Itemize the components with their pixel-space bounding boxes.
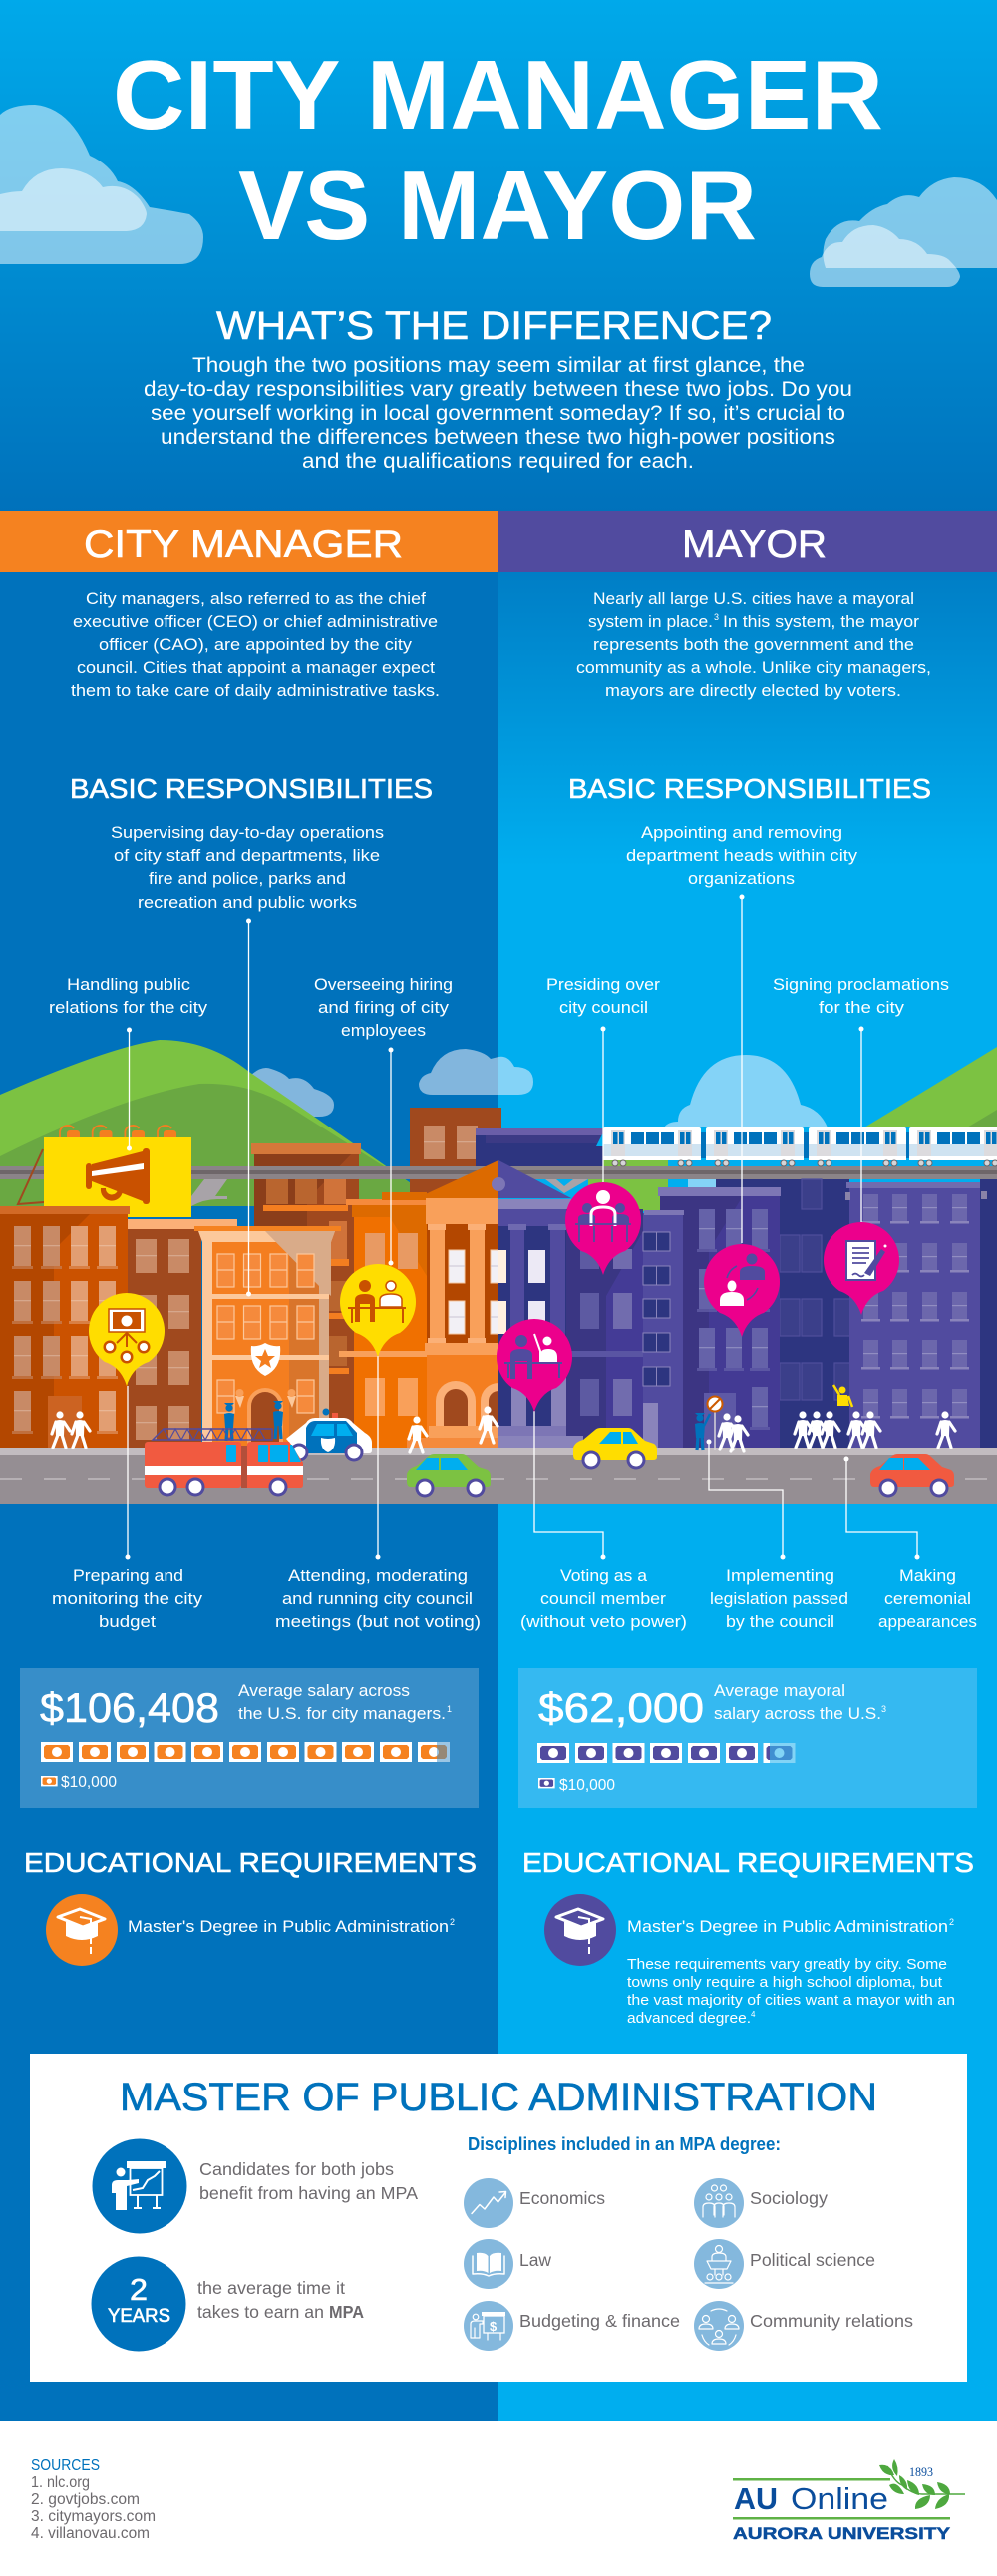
header: mayor: MAYOR	[682, 523, 827, 566]
salary caption: salary across the U.S.	[714, 1704, 881, 1723]
hills	[0, 1040, 997, 1211]
sources: 4. villanovau.com	[31, 2525, 150, 2542]
salary caption: 1	[447, 1704, 452, 1714]
mayor description: 3	[714, 612, 719, 622]
billboard with megaphone	[18, 1126, 191, 1217]
scene sky clouds	[249, 1049, 828, 1127]
label: ceremonial: ceremonial	[884, 1589, 971, 1608]
icon: megaphone	[86, 1148, 150, 1204]
pin: signing	[824, 1222, 899, 1315]
mayor description: In this system, the mayor	[723, 612, 919, 631]
pin: budget	[89, 1293, 165, 1386]
label: presiding: Presiding over	[546, 975, 660, 994]
label: supervising: fire and police, parks and	[149, 869, 346, 888]
city manager description: officer (CAO), are appointed by the city	[99, 635, 413, 654]
education text right: advanced degree.	[627, 2011, 751, 2027]
text: average time: the average time it	[197, 2278, 345, 2298]
disciplines heading: Disciplines included in an MPA degree:	[468, 2134, 781, 2154]
discipline: community relations: Community relations	[750, 2311, 913, 2331]
label: voting	[520, 1566, 687, 1631]
label: overseeing hiring: employees	[341, 1021, 426, 1040]
text: average time	[197, 2278, 364, 2322]
title: CITY MANAGER	[113, 40, 883, 150]
mayor description: Nearly all large U.S. cities have a mayoral	[593, 589, 914, 608]
text: benefit: benefit from having an MPA	[199, 2183, 418, 2203]
panel: master of public administration	[30, 2054, 967, 2382]
pedestrians	[52, 1406, 955, 1452]
label: handling public relations: relations for the city	[49, 998, 208, 1017]
label: voting: Voting as a	[560, 1566, 648, 1585]
discipline: budgeting and finance	[464, 2301, 680, 2351]
salary caption: 3	[881, 1704, 886, 1714]
text: average time: MPA	[329, 2302, 364, 2322]
sources: 3. citymayors.com	[31, 2508, 156, 2525]
heading: basic responsibilities left: BASIC RESPONSIBILITIES	[70, 773, 433, 804]
education text right: 4	[751, 2010, 756, 2019]
logo: AU Online Aurora University: Online	[791, 2481, 888, 2516]
header: city manager: CITY MANAGER	[84, 523, 403, 566]
label: implementing: Implementing	[726, 1566, 834, 1585]
discipline: budgeting and finance: Budgeting & finance	[519, 2311, 680, 2331]
label: overseeing hiring: and firing of city	[318, 998, 450, 1017]
logo: AU Online Aurora University: AU	[734, 2481, 778, 2516]
intro paragraph: see yourself working in local government someday? If so, it’s crucial to	[151, 401, 845, 425]
heading: basic responsibilities right: BASIC RESPONSIBILITIES	[568, 773, 931, 804]
panel heading: MASTER OF PUBLIC ADMINISTRATION	[120, 2076, 877, 2119]
street	[0, 1448, 997, 1504]
mayor description: community as a whole. Unlike city managers,	[576, 658, 931, 677]
yellow car	[573, 1428, 657, 1469]
label: supervising: recreation and public works	[138, 893, 357, 912]
label: appointing: Appointing and removing	[641, 823, 842, 842]
mayor description: mayors are directly elected by voters.	[605, 681, 901, 700]
label: signing: Signing proclamations	[773, 975, 949, 994]
label: implementing	[710, 1566, 848, 1631]
discipline: sociology	[694, 2178, 828, 2228]
pin: presiding	[565, 1182, 641, 1275]
text: benefit: Candidates for both jobs	[199, 2159, 394, 2179]
police officers and sign	[224, 1396, 722, 1450]
discipline: law: Law	[519, 2250, 551, 2270]
label: attending meetings: Attending, moderating	[288, 1566, 468, 1585]
city manager description: council. Cities that appoint a manager expect	[77, 658, 435, 677]
leader dots	[126, 895, 919, 1559]
mayor description	[576, 589, 931, 700]
label: presiding	[546, 975, 660, 1017]
label: voting: council member	[540, 1589, 666, 1608]
discipline: economics: Economics	[519, 2188, 605, 2208]
label: voting: (without veto power)	[520, 1612, 687, 1631]
city manager description: City managers, also referred to as the chief	[86, 589, 426, 608]
education text right: These requirements vary greatly by city. Some	[627, 1957, 947, 1973]
salary caption: Average salary across	[238, 1681, 410, 1700]
salary figure: $62,000	[538, 1684, 704, 1731]
icon: graduation cap orange	[46, 1894, 118, 1966]
salary caption	[714, 1681, 886, 1723]
intro paragraph: Though the two positions may seem similar at first glance, the	[192, 353, 805, 377]
education text right	[627, 1917, 955, 2027]
elevated track	[0, 1166, 997, 1179]
label: preparing budget: monitoring the city	[52, 1589, 203, 1608]
mayor description: system in place.	[588, 612, 713, 631]
subtitle: WHAT’S THE DIFFERENCE?	[216, 304, 772, 348]
discipline: community relations	[694, 2301, 913, 2351]
label: overseeing hiring	[314, 975, 453, 1040]
intro paragraph: and the qualifications required for each.	[302, 449, 694, 473]
icon: presenter	[92, 2139, 187, 2233]
logo: AU Online Aurora University	[733, 2459, 965, 2543]
label: preparing budget	[52, 1566, 203, 1631]
intro paragraph: day-to-day responsibilities vary greatly between these two jobs. Do you	[144, 377, 852, 401]
label: appointing: organizations	[688, 869, 795, 888]
education text left: Master's Degree in Public Administration	[128, 1917, 449, 1936]
label: appointing	[626, 823, 858, 888]
education text right: towns only require a high school diploma, but	[627, 1975, 942, 1991]
intro paragraph	[144, 353, 852, 473]
city scene	[0, 895, 997, 1559]
orange building	[354, 1216, 427, 1448]
icon: laurel branch	[879, 2459, 965, 2509]
label: handling public relations: Handling public	[67, 975, 191, 994]
label: supervising: of city staff and departments, like	[114, 846, 380, 865]
discipline: economics	[464, 2178, 605, 2228]
fire truck	[145, 1429, 303, 1497]
label: overseeing hiring: Overseeing hiring	[314, 975, 453, 994]
red car	[870, 1454, 954, 1497]
label: ceremonial	[878, 1566, 977, 1631]
discipline: political science	[694, 2239, 875, 2289]
label: preparing budget: Preparing and	[73, 1566, 183, 1585]
label: attending meetings: meetings (but not voting)	[275, 1612, 481, 1631]
label: implementing: by the council	[726, 1612, 834, 1631]
discipline: budgeting and finance: $	[490, 2319, 498, 2334]
intro paragraph: understand the differences between these two high-power positions	[161, 425, 835, 449]
elevated train	[596, 1127, 997, 1166]
city manager description: executive officer (CEO) or chief administrative	[73, 612, 438, 631]
icon: police shield	[251, 1343, 280, 1376]
panel: mayor salary	[518, 1668, 977, 1808]
education text right: 2	[949, 1917, 954, 1927]
salary caption: Average mayoral	[714, 1681, 845, 1700]
purple courthouse half	[498, 1208, 566, 1448]
clouds: header left	[0, 105, 203, 264]
label: ceremonial: appearances	[878, 1612, 977, 1631]
label: supervising: Supervising day-to-day operations	[111, 823, 384, 842]
green car	[407, 1454, 491, 1497]
discipline: political science: Political science	[750, 2250, 875, 2270]
salary caption: the U.S. for city managers.	[238, 1704, 446, 1723]
police car	[286, 1413, 372, 1461]
mayor description: represents both the government and the	[593, 635, 914, 654]
sources	[31, 2457, 156, 2542]
heading: educational requirements left: EDUCATIONAL REQUIREMENTS	[24, 1847, 477, 1878]
logo: AU Online Aurora University: 1893	[909, 2465, 933, 2479]
heading: educational requirements right: EDUCATIONAL REQUIREMENTS	[522, 1847, 974, 1878]
education text left: 2	[450, 1917, 455, 1927]
label: implementing: legislation passed	[710, 1589, 848, 1608]
header: mayor	[498, 511, 997, 572]
label: attending meetings: and running city council	[282, 1589, 473, 1608]
logo: AU Online Aurora University: AURORA UNIVERSITY	[733, 2524, 951, 2543]
icon: two years: 2	[130, 2272, 148, 2307]
label: preparing budget: budget	[99, 1612, 156, 1631]
sources: SOURCES	[31, 2457, 100, 2474]
right buildings	[492, 1160, 997, 1448]
city manager description	[71, 589, 440, 700]
icon: graduation cap purple	[544, 1894, 616, 1966]
clouds: header right	[810, 177, 997, 287]
leader lines	[128, 897, 917, 1557]
pin: appointing	[704, 1244, 780, 1337]
salary caption	[238, 1681, 452, 1723]
salary figure: $106,408	[40, 1684, 219, 1731]
education text right: Master's Degree in Public Administration	[627, 1917, 948, 1936]
behind station	[324, 1236, 359, 1448]
label: attending meetings	[275, 1566, 481, 1631]
rear buildings	[191, 1108, 603, 1244]
header: city manager	[0, 511, 498, 572]
bills pictogram	[537, 1743, 796, 1763]
title	[113, 40, 883, 260]
label: signing	[773, 975, 949, 1017]
sources: 2. govtjobs.com	[31, 2491, 140, 2508]
text: benefit	[199, 2159, 418, 2203]
discipline: law	[464, 2239, 551, 2289]
text: average time: takes to earn an	[197, 2302, 324, 2322]
education text right: the vast majority of cities want a mayor with an	[627, 1993, 955, 2009]
orange courthouse half	[427, 1208, 498, 1448]
legend: $10,000	[61, 1774, 117, 1791]
station	[202, 1241, 329, 1448]
left buildings	[0, 1160, 506, 1448]
city manager description: them to take care of daily administrative tasks.	[71, 681, 440, 700]
bills pictogram	[41, 1742, 450, 1762]
label: appointing: department heads within city	[626, 846, 858, 865]
panel: city manager salary	[20, 1668, 479, 1808]
label: signing: for the city	[819, 998, 905, 1017]
legend: $10,000	[559, 1777, 615, 1794]
icon: two years	[92, 2257, 185, 2351]
icon: two years: YEARS	[108, 2306, 170, 2327]
yellow figure on shoulders	[833, 1385, 852, 1407]
sources: 1. nlc.org	[31, 2474, 90, 2491]
label: presiding: city council	[559, 998, 648, 1017]
label: handling public relations	[49, 975, 208, 1017]
pin: hiring	[340, 1264, 416, 1357]
pin: voting	[497, 1319, 572, 1412]
title: VS MAYOR	[238, 151, 757, 260]
label: ceremonial: Making	[899, 1566, 956, 1585]
discipline: sociology: Sociology	[750, 2188, 828, 2208]
label: supervising	[111, 823, 384, 912]
